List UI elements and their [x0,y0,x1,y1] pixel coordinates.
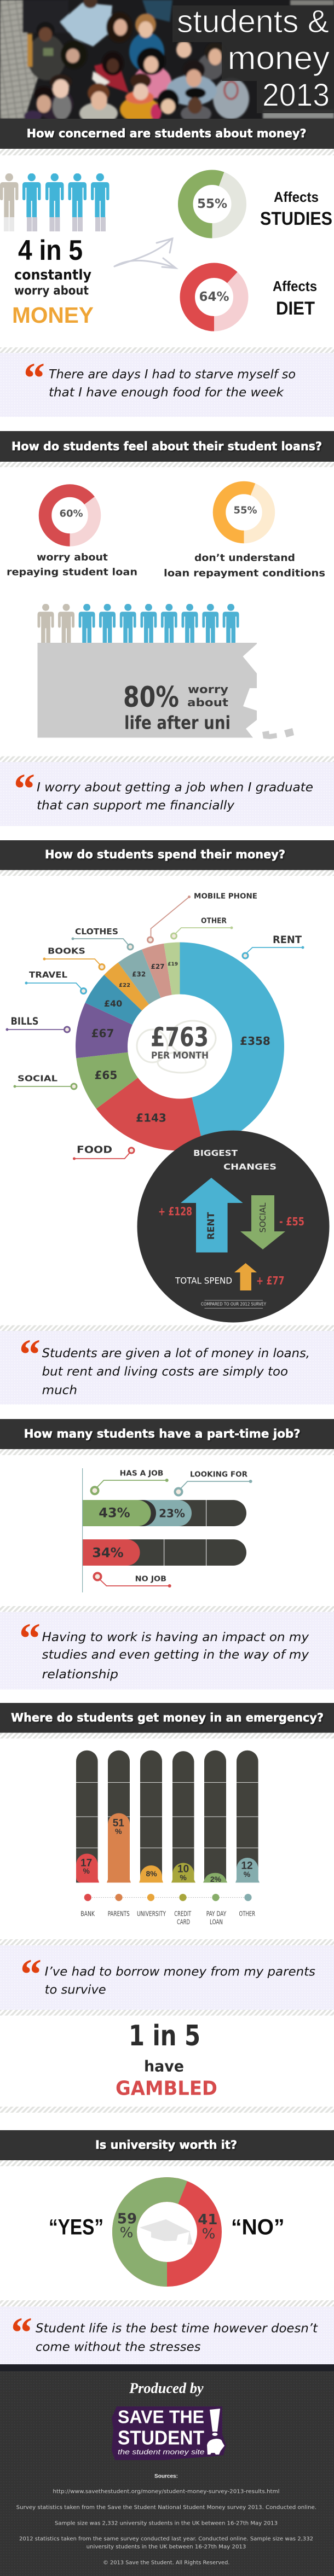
callout: bills [5,1015,70,1032]
legend: emergency sources: CREDIT [174,1910,192,1918]
bar: bank 17%: 17 [80,1858,92,1869]
panel: biggest changes: RENT [206,1212,217,1240]
text: affects diet: DIET [276,298,315,319]
cliff block: 80% worry about life after uni: 80% [123,681,179,714]
panel: biggest changes: + £128 [158,1205,192,1218]
donut: 55% affects studies [186,177,239,231]
cliff block: 80% worry about life after uni: life after uni [124,712,231,733]
text: sources: Survey statistics taken from the Save the Student National Student Money survey 2013. Conducted online. [16,2504,316,2511]
donut: university worth it: 59 [117,2211,137,2228]
arrow: social down [240,1195,285,1249]
donut values: £358 [240,1034,270,1048]
text: sources [16,2474,316,2566]
legend: emergency sources [80,1894,255,1926]
quote: borrow from parents: I’ve had to borrow money from my parents [45,1965,315,1979]
quote: student life [0,2306,334,2364]
bar: parents 51%: 51 [113,1817,124,1829]
donut values [91,962,270,1125]
heading: produced by: Produced by [129,2380,204,2396]
quote: job [0,762,334,826]
bar: has a job 43% [83,1500,151,1526]
text: sources: university students in the UK between 16-27th May 2013 [87,2544,246,2550]
panel: biggest changes [137,1130,330,1323]
bar chart: emergency money [76,1751,260,1883]
callout: food [73,1144,134,1160]
bar chart: part-time jobs [82,1468,246,1592]
icon: exclamation mark [210,2409,220,2432]
stat: 4 in 5 worry about money: MONEY [12,303,94,328]
legend: emergency sources: UNIVERSITY [137,1910,166,1918]
callout: mobile phone [148,893,257,943]
bar: credit card 10%: 10 [177,1863,189,1875]
text: do not understand [164,553,325,579]
arrow: total up [234,1263,257,1290]
stat: 1 in 5 have gambled [116,2020,217,2100]
logo: save the student: STUDENT [118,2427,204,2449]
legend: emergency sources: PARENTS [108,1910,130,1918]
section heading: concern [0,119,334,149]
bar: bank 17% [76,1853,99,1883]
donut values: £65 [95,1069,117,1082]
quote: loans and rent [0,1330,334,1405]
donut values: £40 [104,998,122,1009]
donut centre: coins and total: £763 [151,1022,209,1053]
panel: biggest changes: COMPARED TO OUR 2012 SURVEY [201,1302,266,1306]
quote: student life: Student life is the best time however doesn’t [36,2322,318,2336]
callout: other: OTHER [201,917,227,926]
stat: 1 in 5 have gambled: 1 in 5 [129,2020,200,2052]
section heading: worth it: Is university worth it? [95,2138,237,2151]
text: sources: Sample size was 2,332 university students in the UK between 16-27th May 2013 [55,2521,278,2526]
bar: university 8% [139,1865,163,1883]
icon row: ten people [37,604,239,643]
quote: job: “ [14,765,35,812]
donut values: £22 [119,982,130,988]
section heading: loans [0,431,334,462]
text: sources: Sources: [154,2474,178,2479]
label: yes: “YES” [49,2216,103,2240]
panel: biggest changes: CHANGES [223,1162,277,1172]
callout: bills: BILLS [11,1015,38,1027]
legend: emergency sources: BANK [80,1910,95,1918]
bar: other 12% [235,1858,260,1883]
bar chart: part-time jobs: 23% [159,1507,185,1520]
section heading: spending [0,840,334,870]
donut: 64% affects diet: 64% [199,290,229,304]
panel: biggest changes: BIGGEST [193,1148,238,1158]
donut: 60% worry: 60% [59,508,83,520]
bar: pay day loan 2%: 2% [210,1875,222,1883]
logo: save the student: SAVE THE [118,2407,204,2427]
section heading: worth it [0,2130,334,2160]
donut values: £143 [136,1112,166,1125]
hero photo of students [0,0,334,124]
callout: clothes: CLOTHES [75,927,118,937]
donut values: £27 [151,963,165,970]
panel: biggest changes: TOTAL SPEND [175,1276,232,1286]
quote: starve [0,353,334,417]
bar: parents 51%: % [115,1827,122,1836]
callout: looking for [175,1470,252,1496]
text: worry about repaying: worry about [37,551,108,563]
callout: mobile phone: MOBILE PHONE [194,893,257,900]
text: worry about repaying [7,551,137,578]
callout: no job: NO JOB [135,1575,166,1583]
logo: save the student: the student money site [118,2447,205,2456]
text: worry about repaying: repaying student loan [7,567,137,578]
arrow: rent up [181,1178,243,1253]
section heading: spending: How do students spend their money? [45,848,285,861]
donut: university worth it: 41 [198,2212,217,2228]
text: sources: 2012 statistics taken from the same survey conducted last year. Conducted online. Sample size was 2,332 [19,2536,313,2542]
icon: piggy bank [207,2439,224,2455]
donut chart: monthly spend [102,968,258,1125]
arrow: splitting to both effects [114,239,176,268]
callout: travel: TRAVEL [29,970,67,980]
bar: parents 51% [107,1813,131,1883]
legend: emergency sources: PAY DAY [206,1910,227,1918]
title: 2013 [262,78,330,113]
quote: work impact: Having to work is having an impact on my [42,1631,309,1644]
donut values: £67 [91,1027,114,1040]
quote: job: that can support me financially [37,799,235,813]
bar: no job 34% [83,1539,140,1566]
callout: clothes [71,927,133,950]
donut: university worth it [117,2189,217,2275]
legend: emergency sources: CARD [177,1918,190,1926]
quote: work impact: “ [19,1614,41,1662]
stat: 1 in 5 have gambled: have [144,2057,184,2075]
callout: social: SOCIAL [18,1074,58,1084]
cliff block: 80% worry about life after uni: worry [188,683,228,696]
donut: 55% do not understand [219,488,268,537]
quote: starve: that I have enough food for the week [49,386,284,399]
quote: loans and rent: Students are given a lot of money in loans, [42,1347,310,1360]
callout: travel [25,970,87,993]
text: do not understand: loan repayment conditions [164,568,325,579]
donut: 55% do not understand: 55% [233,504,257,516]
quote: loans and rent: but rent and living costs are simply too [42,1365,288,1379]
quote: job: I worry about getting a job when I graduate [37,781,313,794]
quote: student life: come without the stresses [36,2340,200,2354]
stat: 4 in 5 worry about money: worry about [14,284,89,298]
quote: work impact: studies and even getting in the way of my [42,1648,309,1662]
quote: starve: “ [24,354,45,402]
bar: pay day loan 2% [203,1873,227,1883]
quote: work impact [0,1612,334,1689]
quote: loans and rent: “ [19,1330,41,1378]
donut: university worth it: % [202,2226,215,2242]
donut centre: coins and total [137,1021,216,1073]
donut: university worth it: % [120,2225,133,2241]
quote: borrow from parents: “ [20,1950,42,1998]
donut: 60% worry [45,491,94,540]
text: affects diet [273,278,317,319]
quote: starve: There are days I had to starve myself so [49,368,296,382]
donut centre: coins and total: PER MONTH [151,1050,209,1061]
quote: work impact: relationship [42,1668,118,1682]
icon row: 4 in 5 people [0,173,110,231]
callout: looking for: LOOKING FOR [190,1470,247,1479]
stat: 1 in 5 have gambled: GAMBLED [116,2078,217,2100]
section heading: loans: How do students feel about their student loans? [11,440,322,453]
callout: has a job [91,1469,169,1494]
cliff block: 80% worry about life after uni [37,643,294,739]
donut: 55% affects studies: 55% [197,197,227,211]
legend: emergency sources: OTHER [239,1910,255,1918]
bar: other 12%: 12 [241,1860,253,1872]
stat: 4 in 5 worry about money [12,235,94,328]
donut values: £32 [132,970,146,978]
title: students & [177,4,329,39]
quote: loans and rent: much [42,1384,77,1397]
bar chart: part-time jobs: 43% [99,1505,130,1521]
donut: 64% affects diet [187,270,241,324]
donut values: £19 [168,962,178,967]
callout: has a job: HAS A JOB [120,1469,163,1478]
cliff block: 80% worry about life after uni: about [187,696,228,709]
title [172,4,334,113]
section heading: emergency: Where do students get money in an emergency? [11,1711,324,1724]
callout: books: BOOKS [48,946,85,956]
section heading: emergency [0,1703,334,1733]
bar: looking for 23% [83,1500,192,1526]
text: affects studies [260,189,332,229]
panel: footer [0,2364,334,2576]
section heading: part-time job [0,1419,334,1449]
logo: save the student [112,2406,226,2460]
title: money [228,39,330,77]
quote: borrow from parents: to survive [45,1984,106,1997]
callout: no job [94,1573,171,1588]
label: no: “NO” [231,2216,285,2240]
text: affects studies: Affects [274,189,319,205]
bar: credit card 10%: % [180,1873,187,1882]
callout: rent [243,934,304,958]
bar chart: part-time jobs: 34% [92,1545,124,1560]
legend: emergency sources: LOAN [210,1918,223,1926]
bar: credit card 10% [171,1863,195,1883]
text: sources: http://www.savethestudent.org/money/student-money-survey-2013-results.html [53,2489,279,2494]
panel: biggest changes: SOCIAL [258,1202,268,1232]
callout: social [13,1074,77,1089]
text: do not understand: don’t understand [194,553,295,563]
panel: biggest changes: - £55 [279,1215,304,1228]
bar: bank 17%: % [83,1866,90,1875]
text: sources: © 2013 Save the Student. All Rights Reserved. [103,2560,230,2566]
section heading: part-time job: How many students have a part-time job? [24,1427,301,1440]
section heading: concern: How concerned are students about money? [27,127,307,140]
callout: other [171,917,233,939]
bar: other 12%: % [244,1870,251,1879]
quote: student life: “ [11,2308,32,2356]
callout: food: FOOD [77,1144,112,1155]
stat: 4 in 5 worry about money: 4 in 5 [18,235,83,266]
stat: 4 in 5 worry about money: constantly [14,267,91,283]
bar: university 8%: 8% [146,1869,157,1878]
quote: borrow from parents [0,1945,334,2010]
panel: biggest changes: + £77 [256,1274,285,1287]
callout: books [43,946,105,969]
text: affects diet: Affects [273,278,317,294]
icon: graduation cap [140,2219,193,2244]
callout: rent: RENT [273,934,302,946]
